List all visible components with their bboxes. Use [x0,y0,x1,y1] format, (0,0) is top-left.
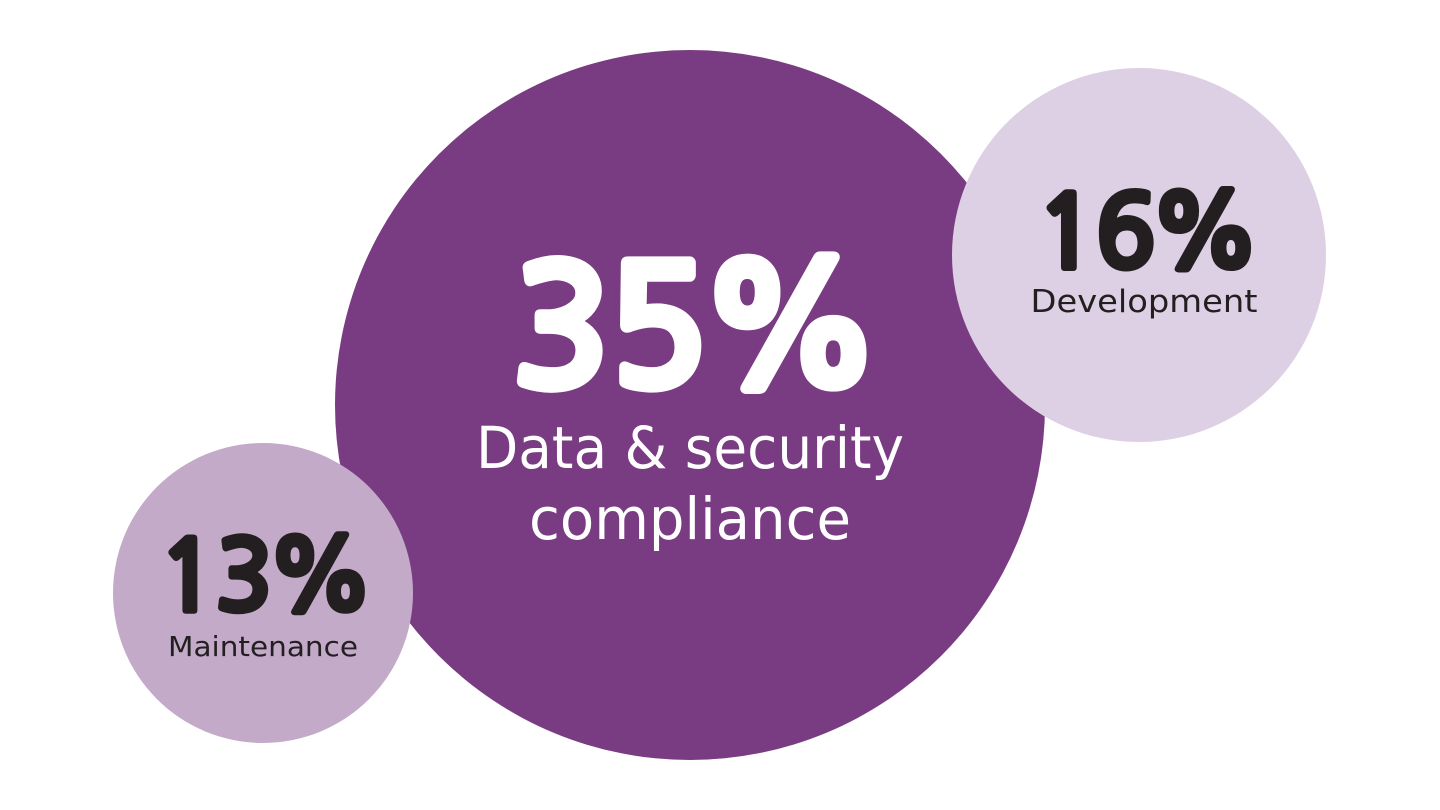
value: 13%: 13% [158,529,374,626]
label: data and security: Data & security [476,414,904,482]
value: 35%: 35% [511,247,882,412]
bubble: maintenance [113,443,413,743]
label: compliance: compliance [529,485,851,553]
value: 16%: 16% [1036,184,1260,284]
bubble: development [952,68,1326,442]
label: maintenance: Maintenance [168,630,358,663]
label: development: Development [1030,284,1258,320]
bubble: data and security compliance [335,50,1045,760]
